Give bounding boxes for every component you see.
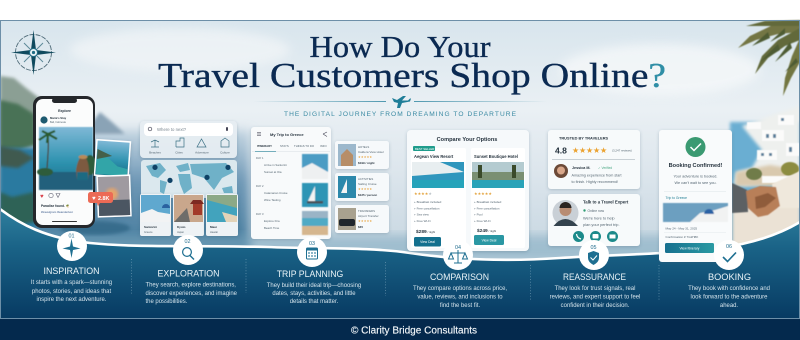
panel: trusted by travelers: TRUSTED BY TRAVELERS: [559, 136, 609, 140]
step: inspiration: [31, 266, 112, 303]
step badge 03: [297, 237, 327, 267]
panel: talk to a travel expert: [548, 194, 640, 246]
panel: trusted by travelers: (3,247 reviews): [612, 148, 632, 152]
plane divider: [253, 96, 547, 108]
card: hotels: ★★★★★: [358, 155, 372, 159]
hotel card: aegean: [411, 146, 466, 248]
panel: talk to a travel expert: Talk to a Travel Expert: [583, 200, 629, 204]
card: hotels: [335, 141, 389, 169]
panel: booking confirmed: Your adventure is booked.: [674, 174, 717, 178]
step badge 04: 04: [455, 245, 461, 251]
step badge 02: [173, 235, 203, 265]
step badge 04: [443, 240, 473, 270]
step: trip planning: details that matter.: [290, 299, 339, 305]
step badge 05: 05: [590, 245, 596, 251]
card: santorini: [140, 194, 171, 236]
contact icons: [573, 231, 618, 242]
panel: trusted by travelers: to finish. Highly recommend!: [572, 180, 618, 184]
itinerary thumbnails: [302, 154, 328, 235]
card: santorini: Santorini: [144, 225, 157, 229]
panel: trip itinerary: STAYS: [280, 144, 289, 148]
santorini village scene: [730, 106, 800, 246]
hotel card: aegean: + Sea view: [414, 212, 430, 216]
card: hotels: Caldera View Hotel: [358, 150, 384, 154]
panel: trip itinerary: DAY 2: [256, 184, 264, 188]
panel: phone inspiration: Bali, Indonesia: [50, 121, 66, 124]
step badge 06: [714, 240, 744, 270]
card: transfers: [335, 205, 389, 233]
likes badge: [88, 192, 113, 206]
footer bar: [0, 319, 800, 340]
search bar: Where to next?: [157, 127, 187, 132]
panel: trip itinerary: ITINERARY: [257, 144, 272, 148]
hotel card: sunset: + Breakfast included: [474, 200, 502, 204]
panel: trip itinerary: Explore Fira: [264, 219, 280, 223]
panel: phone inspiration: Maria's Stay: [50, 116, 67, 120]
panel: trusted by travelers: [548, 130, 640, 189]
panel: trusted by travelers: 4.8: [555, 146, 567, 156]
panel: trip itinerary: Beach Time: [264, 226, 280, 230]
step: reassurance: They look for trust signals, real: [555, 286, 635, 292]
card: activities: $125 / person: [358, 193, 377, 197]
panel: trusted by travelers: ★★★★★: [572, 146, 607, 155]
step: exploration: EXPLORATION: [158, 268, 220, 278]
panel heading: Compare Your Options: [437, 137, 497, 143]
icon: compass rose: [11, 30, 56, 75]
step badge 01: [57, 231, 87, 261]
hotel card: aegean: + Free Wi-Fi: [414, 219, 431, 223]
step badge 01: 01: [68, 234, 74, 240]
card: transfers: Airport Transfer: [358, 214, 379, 218]
panel: trip itinerary: Catamaran Cruise: [264, 191, 288, 195]
hotel card: aegean: + Free cancellation: [414, 206, 440, 210]
panel: booking confirmed: We can't wait to see you.: [674, 181, 717, 185]
destination cards: [140, 194, 238, 236]
step: booking: look forward to the adventure: [691, 294, 768, 300]
title: [158, 29, 666, 95]
panel: exploration search: Cities: [175, 150, 183, 154]
step: exploration: They search, explore destinations,: [146, 282, 236, 288]
step: reassurance: reviews, and expert support to feel: [550, 294, 640, 300]
step badge 02: 02: [184, 239, 190, 245]
step: reassurance: [550, 272, 640, 309]
card: hotels: $199 / night: [358, 161, 375, 165]
card: transfers: $45: [358, 225, 363, 229]
step badge 03: 03: [309, 241, 315, 247]
step: exploration: the possibilities.: [146, 299, 188, 305]
step: trip planning: TRIP PLANNING: [277, 269, 343, 279]
step: booking: ahead.: [720, 303, 738, 309]
card: santorini: Greece: [144, 230, 153, 234]
step: exploration: [146, 268, 238, 305]
panel: phone inspiration: [33, 96, 96, 228]
panel: trip itinerary: [251, 127, 331, 239]
panel: phone inspiration: Explore: [58, 109, 71, 113]
panel: talk to a travel expert: Online now: [588, 209, 605, 213]
panel: booking confirmed: [659, 130, 732, 262]
panel: trip itinerary: DAY 1: [256, 156, 264, 160]
panel: booking confirmed: View Itinerary: [680, 246, 700, 250]
post actions: ♥: [40, 194, 44, 200]
hotel card: sunset: View Deal: [482, 238, 497, 242]
step: exploration: discover experiences, and imagine: [146, 291, 238, 297]
panel: trip itinerary: Sunset at Oia: [264, 170, 282, 174]
title: Travel Customers Shop Online ?: [158, 56, 666, 95]
step: comparison: COMPARISON: [430, 272, 489, 282]
step: booking: [688, 272, 770, 309]
step: inspiration: It starts with a spark—stunning: [31, 280, 112, 286]
booking photo: [663, 203, 728, 222]
card: activities: ★★★★★: [358, 187, 372, 191]
panel: trip itinerary: Arrive in Santorini: [264, 163, 287, 167]
panel: exploration search: [140, 121, 237, 158]
panel: talk to a travel expert: We're here to help: [583, 216, 615, 220]
step: comparison: They compare options across price,: [413, 286, 507, 292]
post photo: [37, 127, 96, 190]
footer bar: © Clarity Bridge Consultants: [351, 326, 477, 336]
hotel card: sunset: + Pool: [474, 212, 483, 216]
palm fronds: [738, 20, 800, 96]
hotel card: sunset: [471, 148, 525, 248]
panel: trip itinerary: THINGS TO DO: [294, 144, 315, 148]
step: trip planning: dates, stays, activities, and little: [272, 291, 356, 297]
likes badge: 2.8K: [98, 196, 109, 202]
panel: phone inspiration: Paradise found. 🌴: [41, 204, 70, 208]
panel: compare your options: [407, 130, 529, 251]
likes badge: ♥: [92, 196, 96, 202]
panel: talk to a travel expert: plan your perfect trip.: [583, 222, 620, 227]
card: transfers: ★★★★★: [358, 219, 372, 223]
step: inspiration: INSPIRATION: [44, 266, 100, 276]
card: activities: ACTIVITIES: [358, 177, 373, 181]
reviewer avatar: [554, 164, 568, 178]
hotel card: sunset: ★★★★★: [474, 191, 492, 196]
panel: trusted by travelers: ✓ Verified: [598, 166, 612, 170]
panel: booking confirmed: Confirmation # 7G2H8K: [666, 235, 699, 239]
card: transfers: TRANSFERS: [358, 209, 375, 213]
card: activities: [335, 173, 389, 201]
hotel card: aegean: BEST SELLER: [415, 147, 434, 151]
hotel card: aegean: Aegean View Resort: [414, 154, 454, 159]
panel: trip itinerary: DAY 3: [256, 212, 264, 216]
hotel card: sunset: + Free cancellation: [474, 206, 500, 210]
subtitle: THE DIGITAL JOURNEY FROM DREAMING TO DEPARTURE: [284, 111, 517, 118]
hotel card: aegean: View Deal: [420, 240, 435, 244]
icon: green check: [686, 137, 706, 157]
step: inspiration: inspire the next adventure.: [37, 297, 107, 303]
card: maui: Maui: [210, 225, 217, 229]
panel: trip itinerary: My Trip to Greece: [270, 132, 304, 137]
hotel card: aegean: ★★★★★: [414, 191, 432, 196]
step: comparison: value, reviews, and inclusions to: [417, 294, 503, 300]
panel: booking confirmed: Trip to Greece: [666, 196, 687, 200]
hotel card: sunset: + Free Wi-Fi: [474, 219, 491, 223]
inspiration photos: [94, 139, 132, 218]
panel: trusted by travelers: Amazing experience from start: [572, 174, 622, 178]
panel: trip option cards: [335, 141, 389, 233]
step: inspiration: photos, stories, and ideas that: [32, 289, 111, 295]
wave and lower teal band: [0, 209, 800, 319]
step: reassurance: REASSURANCE: [563, 272, 626, 282]
title: How Do Your: [310, 29, 491, 64]
hotel card: sunset: Sunset Boutique Hotel: [474, 154, 518, 159]
card: kyoto: [173, 194, 204, 236]
category icons: [151, 138, 229, 147]
card: activities: Sailing Cruise: [358, 182, 377, 186]
panel: exploration search: Beaches: [149, 150, 161, 154]
panel: trip itinerary: Wine Tasting: [264, 198, 281, 202]
card: kyoto: Japan: [177, 230, 185, 234]
expert avatar: [552, 200, 578, 226]
panel: exploration search: Adventure: [195, 150, 209, 154]
panel: phone inspiration: #travelgram #wanderlust: [41, 210, 73, 214]
hotel card: sunset: $249 / night: [477, 228, 496, 234]
hotel card: aegean: + Breakfast included: [414, 200, 442, 204]
panel: exploration search: Culture: [220, 150, 230, 154]
hotel card: aegean: $289 / night: [416, 229, 435, 235]
panel: trusted by travelers: Jessica M.: [572, 166, 590, 170]
step badge 05: [579, 240, 609, 270]
step: trip planning: [267, 269, 361, 305]
panel: booking confirmed: Booking Confirmed!: [669, 163, 723, 169]
step: comparison: find the best fit.: [440, 303, 480, 309]
card: hotels: HOTELS: [358, 145, 369, 149]
step badge 06: 06: [726, 244, 732, 250]
step: reassurance: confident in their decision.: [561, 303, 630, 309]
world map: [141, 160, 237, 198]
step: booking: BOOKING: [708, 272, 751, 282]
card: maui: [206, 194, 238, 236]
handshake photo: [732, 171, 800, 217]
panel: booking confirmed: May 24 - May 31, 2025: [666, 226, 697, 230]
step: trip planning: They build their ideal trip—choosing: [267, 283, 361, 289]
step: booking: They book with confidence and: [688, 286, 770, 292]
card: kyoto: Kyoto: [177, 225, 186, 229]
step: comparison: [413, 272, 507, 309]
card: maui: Hawaii: [210, 230, 218, 234]
panel: trip itinerary: INFO: [320, 144, 328, 148]
